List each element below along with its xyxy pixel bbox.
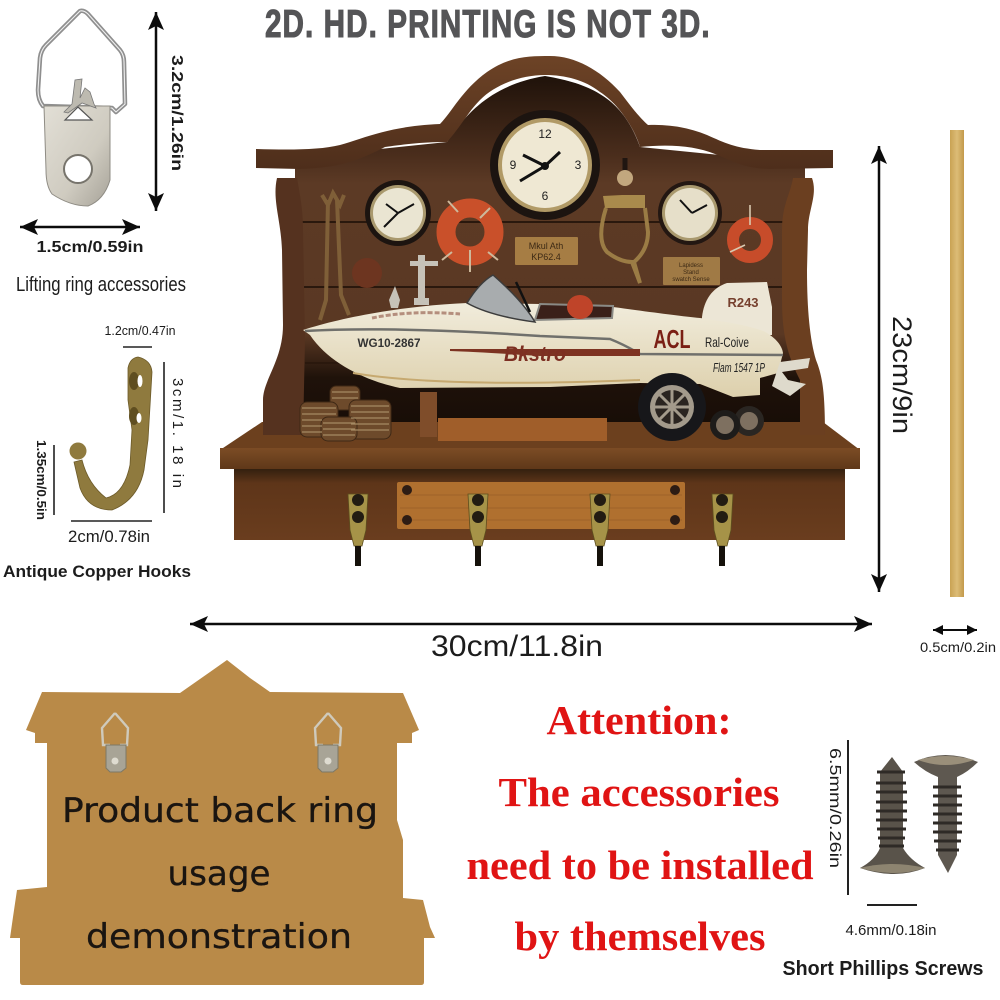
demonstration text: Product back ring [62,791,378,831]
tongs [320,193,349,320]
plaque right [663,257,720,285]
life ring right [730,205,767,257]
shelf top surface [220,422,860,450]
label: lifting ring accessories: Lifting ring accessories [16,274,186,296]
large clock: 3 [575,158,582,172]
back rings [102,713,341,772]
marker line: screw height [847,740,849,895]
label: antique copper hooks: Antique Copper Hooks [3,562,191,581]
caliper tool [601,158,648,283]
crown top [256,56,833,169]
icon: antique copper hook [70,357,152,510]
attention notice [466,697,814,959]
attention notice: Attention: [546,697,732,743]
arrow: height 23cm [878,146,880,592]
icon: lifting ring accessory [38,11,125,206]
boat text: WG10-2867 [358,336,421,350]
left support [263,178,305,435]
right support [782,178,825,435]
arrow: thickness [933,629,977,631]
panel: product back demonstration: demonstration [86,917,352,957]
panel: boat wall shelf [220,56,860,566]
plaque right: swatch Sense [672,277,710,283]
marker line: screw width [867,904,917,906]
large clock: 9 [510,158,517,172]
boat script: Bkstro [504,343,566,366]
panel: product back demonstration [10,660,435,985]
large clock: 6 [542,189,549,203]
panel: boat wall shelf: Ral-Coive [705,334,749,350]
label: hook width: 2cm/0.78in [68,527,150,546]
boat stand [420,392,437,437]
arrow: ring height [155,12,157,211]
panel: product back demonstration: usage [168,854,270,894]
attention notice: need to be installed [466,842,814,888]
attention notice: by themselves [514,913,766,959]
arrow: ring width [20,226,140,228]
label: hook depth: 1.35cm/0.5in [34,440,49,520]
label: hook height: 3cm/1. 18 in [169,378,186,488]
skeg and propeller [772,358,810,396]
hooks [348,494,733,566]
plaque left [515,237,578,265]
label: width: 30cm/11.8in [431,630,603,663]
marker line: hook width [71,520,152,522]
icon: phillips screws [860,755,978,874]
deck script [372,313,460,318]
label: short phillips screws: Short Phillips Screws [782,958,984,980]
arrow: width 30cm [190,623,872,625]
label: thickness: 0.5cm/0.2in [920,639,996,655]
faucet fittings [389,255,438,308]
boat fin [702,282,772,335]
back boards [295,76,805,435]
marker line: hook height [163,362,165,513]
label: height: 23cm/9in [887,316,917,434]
boat stand board [438,418,607,441]
right clock [658,181,722,245]
attention notice: The accessories [498,769,780,815]
marker line: hook depth [53,445,55,515]
label: ring height: 3.2cm/1.26in [168,55,185,171]
windshield [467,275,535,322]
plaque right: Lapidess [679,263,703,269]
panel: boat wall shelf: ACL [654,324,691,354]
name plate [397,482,685,529]
cockpit and seat [535,304,613,320]
large clock [490,110,600,220]
label: hook width top: 1.2cm/0.47in [104,323,176,338]
side profile strip [950,130,964,597]
life ring left [442,201,498,272]
marker line: hook top width [123,346,152,348]
shelf front plank [220,448,860,469]
left clock [365,180,431,246]
panel: boat wall shelf: Flam 1547 1P [713,360,765,375]
plaque right: Stand [683,270,699,276]
lower rail [234,469,845,540]
large clock: 12 [538,127,552,141]
panel: boat wall shelf: R243 [727,295,759,310]
round buoy [352,258,382,288]
wheels [638,373,764,441]
heading: 2D. HD. PRINTING IS NOT 3D. [265,3,710,46]
boat hull [303,303,783,397]
label: screw width: 4.6mm/0.18in [846,922,936,939]
label: screw height: 6.5mm/0.26in [826,748,843,868]
plaque left: Mkul Ath [529,241,563,251]
label: ring width: 1.5cm/0.59in [36,239,144,256]
coin stacks [300,386,391,441]
plaque left: KP62.4 [531,252,561,262]
